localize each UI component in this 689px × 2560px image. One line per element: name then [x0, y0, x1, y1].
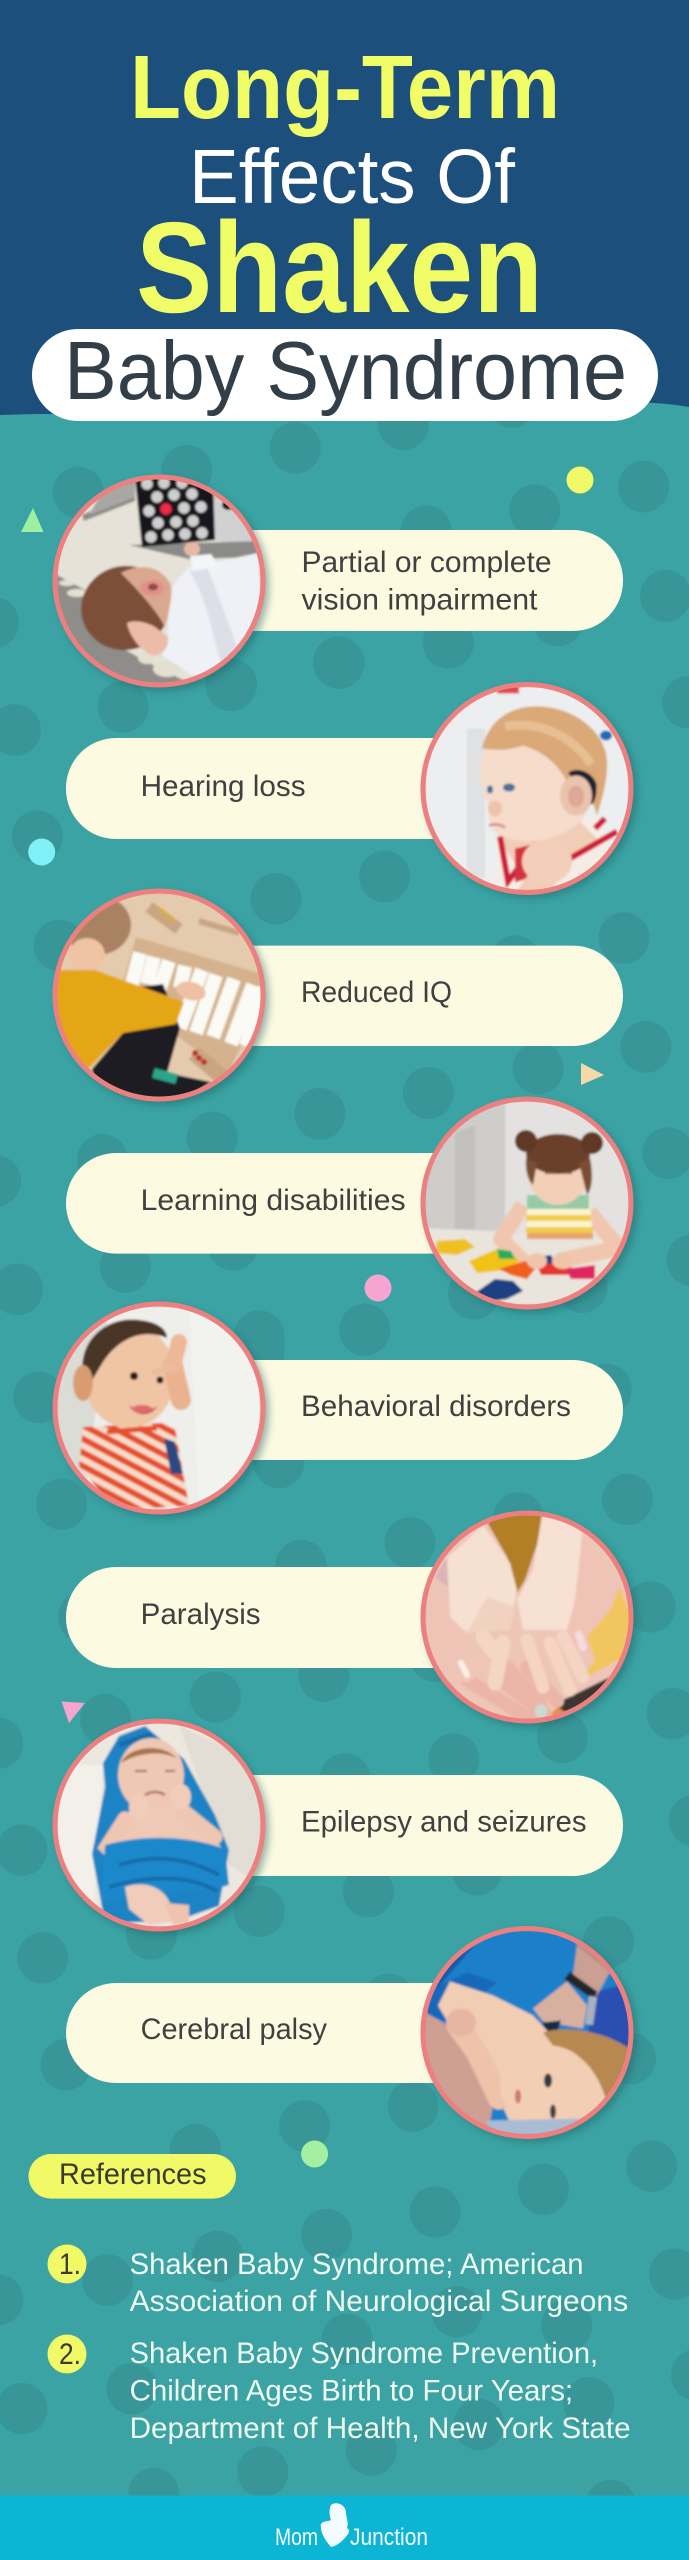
- photo: baby receiving physiotherapy: [420, 1926, 634, 2139]
- MomJunction logo: Mom: [275, 2524, 318, 2551]
- label pill: [66, 1983, 529, 2083]
- item 3: reduced IQ: [52, 888, 623, 1105]
- references heading: References: [59, 2158, 206, 2191]
- reference 2: Children Ages Birth to Four Years;: [130, 2375, 573, 2408]
- photo: newborn wrapped in blue cloth: [52, 1718, 266, 1932]
- label pill: [160, 530, 623, 631]
- label pill: Partial or complete: [302, 546, 552, 579]
- label pill: Reduced IQ: [301, 976, 452, 1009]
- item 2: hearing loss: [66, 682, 637, 898]
- reference 1: 1.: [59, 2248, 81, 2281]
- label pill: Paralysis: [141, 1598, 261, 1631]
- photo: smiling toddler in striped shirt: [52, 1302, 266, 1514]
- label pill: Behavioral disorders: [301, 1390, 571, 1423]
- header background: [0, 0, 689, 421]
- icon: mother and baby heart: [321, 2503, 349, 2547]
- label pill: Epilepsy and seizures: [301, 1806, 586, 1838]
- reference 1: Shaken Baby Syndrome; American: [130, 2248, 584, 2281]
- reference 2: Shaken Baby Syndrome Prevention,: [130, 2337, 598, 2370]
- label pill: [66, 1567, 529, 1668]
- title: Long-Term: [130, 38, 560, 138]
- label pill: [66, 738, 529, 839]
- decoration: cyan dot: [28, 838, 55, 866]
- label pill: [160, 1775, 623, 1876]
- title: Effects Of: [189, 134, 516, 220]
- decoration: pink triangle: [62, 1702, 85, 1723]
- label pill: Hearing loss: [141, 770, 306, 803]
- decoration: green dot: [301, 2140, 328, 2168]
- decoration: green triangle: [21, 508, 44, 532]
- label pill: Learning disabilities: [141, 1184, 406, 1217]
- MomJunction logo: [275, 2503, 428, 2551]
- item 4: learning disabilities: [66, 1096, 637, 1313]
- MomJunction logo: Junction: [350, 2524, 428, 2551]
- item 6: paralysis: [66, 1510, 637, 1727]
- item 7: epilepsy and seizures: [52, 1718, 623, 1935]
- photo: girl with jigsaw puzzle: [420, 1096, 634, 1310]
- decoration: pink dot: [364, 1274, 392, 1302]
- item 1: vision impairment: [52, 474, 623, 691]
- photo: toddler with number board: [52, 888, 266, 1102]
- reference 1: [48, 2244, 628, 2318]
- photo: child's hands held by adult hands: [420, 1510, 634, 1724]
- references heading: [28, 2154, 236, 2199]
- reference 1: Association of Neurological Surgeons: [130, 2285, 628, 2318]
- item 5: behavioral disorders: [52, 1302, 623, 1518]
- decoration: yellow dot: [566, 466, 594, 494]
- footer bar: [0, 2496, 689, 2560]
- title: [32, 38, 658, 421]
- label pill: [160, 946, 623, 1046]
- photo: baby lying on mat with black and white card: [52, 474, 266, 688]
- reference 2: Department of Health, New York State: [130, 2412, 631, 2445]
- reference 2: 2.: [59, 2338, 81, 2371]
- label pill: vision impairment: [302, 584, 538, 616]
- title: Baby Syndrome: [64, 324, 627, 417]
- reference 2: [48, 2334, 631, 2445]
- decoration: beige triangle: [581, 1063, 604, 1085]
- label pill: Cerebral palsy: [141, 2013, 327, 2046]
- label pill: [66, 1153, 529, 1254]
- photo: toddler with hearing aid: [420, 682, 634, 895]
- title: Shaken: [136, 196, 543, 340]
- label pill: [160, 1360, 623, 1460]
- item 8: cerebral palsy: [66, 1926, 637, 2142]
